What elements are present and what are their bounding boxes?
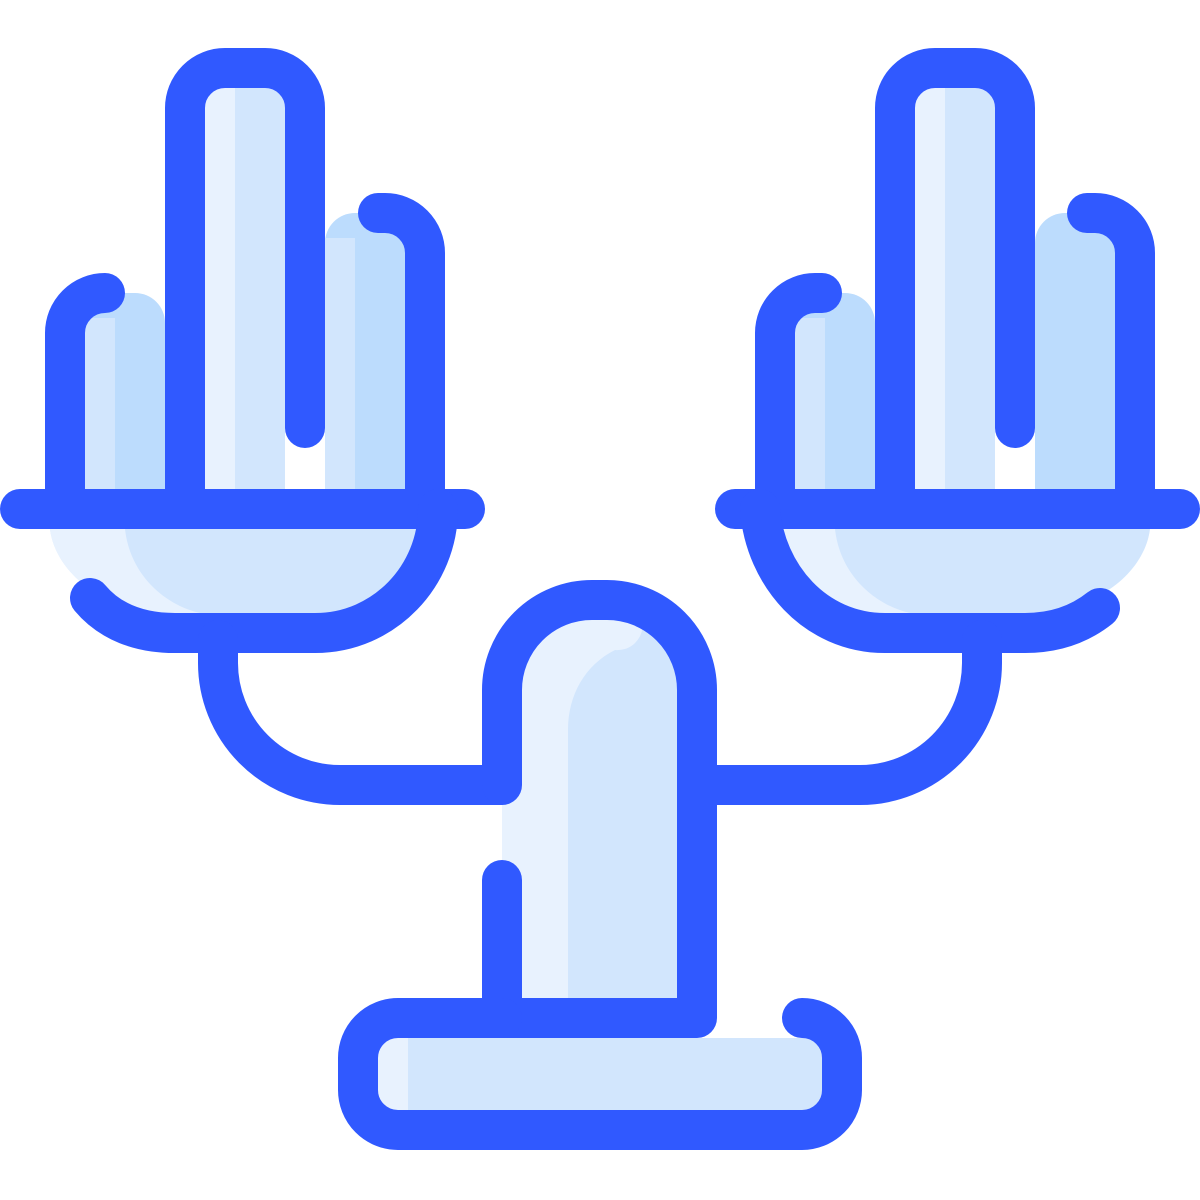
left small candles fill	[85, 293, 165, 560]
stem fill	[502, 600, 697, 1018]
strokes	[20, 68, 502, 785]
right tall candle fill	[915, 88, 995, 560]
base fill	[378, 1038, 822, 1110]
left bowl fill	[50, 529, 438, 613]
left holder	[20, 68, 502, 785]
tall candle fill	[205, 88, 285, 560]
central stem and base	[358, 600, 842, 1130]
right small candles fill	[795, 293, 875, 560]
right holder	[697, 68, 1180, 785]
right bowl fill	[760, 529, 1150, 613]
